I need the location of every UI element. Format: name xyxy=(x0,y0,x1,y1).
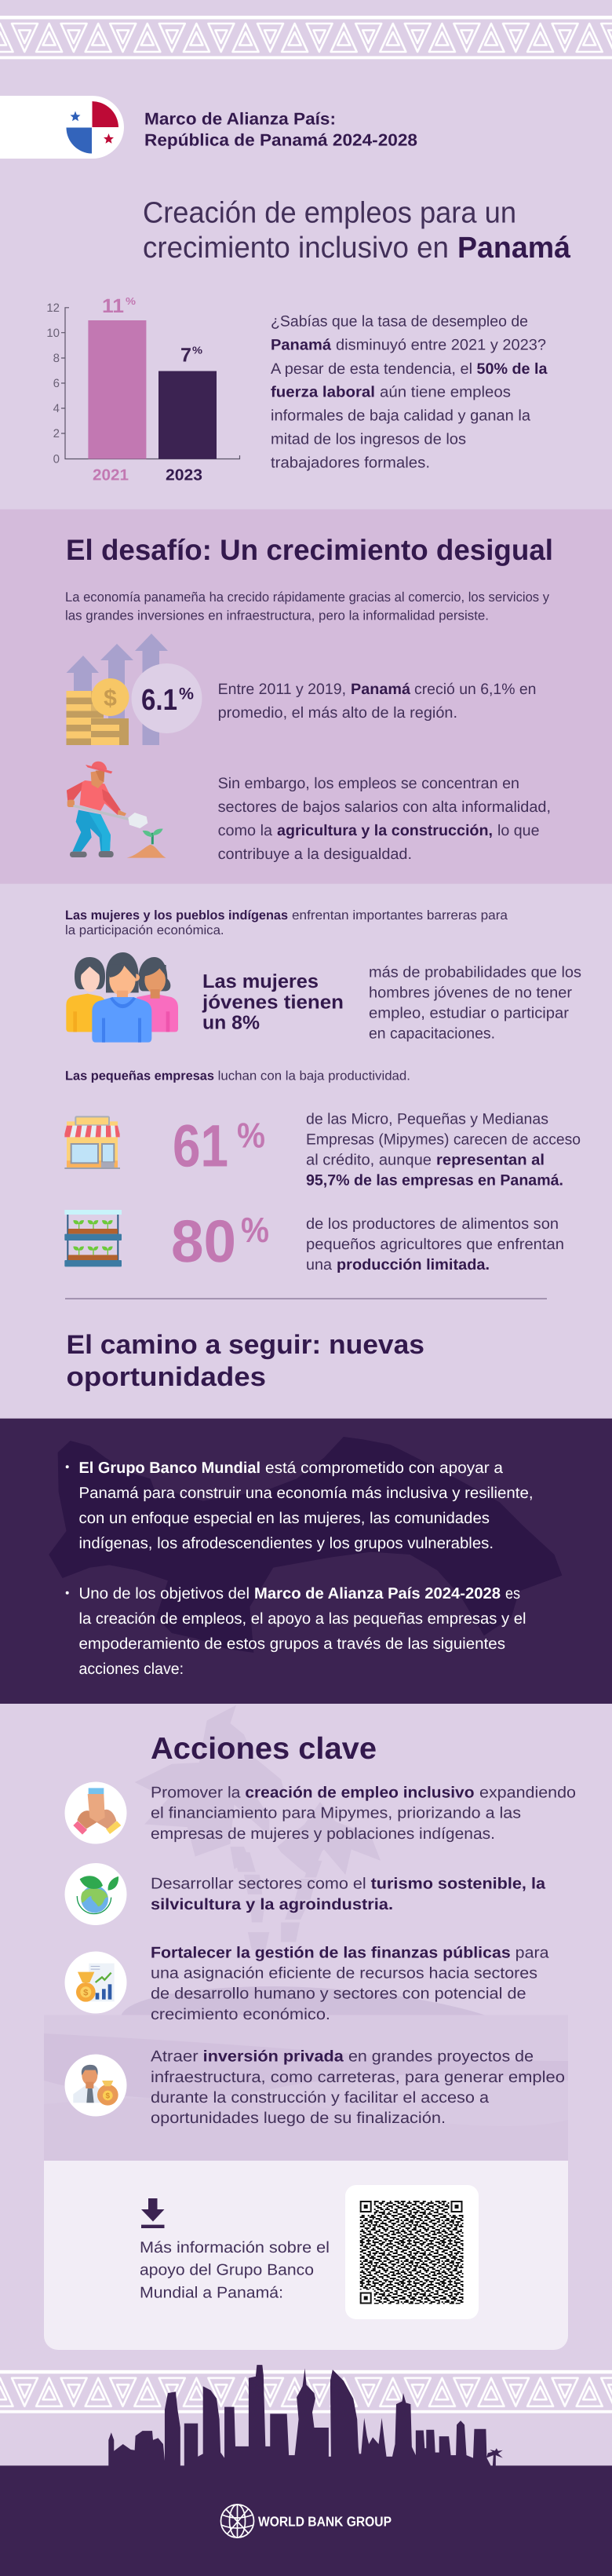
icon: growth arrows and coins with 6.1%: 6.1 xyxy=(141,684,177,717)
text block: MSME credit: al crédito, aunque xyxy=(306,1151,432,1168)
title xyxy=(143,197,571,265)
text block: public finances: para xyxy=(515,1945,549,1962)
stat: young women 8%: un 8% xyxy=(202,1012,260,1033)
stat: 80%: 80 xyxy=(171,1208,236,1275)
icon: globe with leaves xyxy=(64,1863,127,1925)
text block: inclusive employment: expandiendo xyxy=(479,1785,576,1802)
title: Creación de empleos para un xyxy=(143,197,516,230)
text block: food producers xyxy=(306,1215,564,1273)
heading: the challenge: El desafío: Un crecimiento desigual xyxy=(66,534,553,566)
text block: low wage sectors: Sin embargo, los empleos se concentran en xyxy=(218,775,519,792)
heading: the way forward xyxy=(66,1330,424,1392)
text block: private investment: oportunidades luego de su finalización. xyxy=(151,2110,446,2127)
text block: growth: Panamá xyxy=(351,681,410,698)
text block: unemployment explanation xyxy=(271,312,548,471)
text block: food producers: una xyxy=(306,1256,332,1273)
axis label: 2021: 2021 xyxy=(93,466,129,484)
text block: unemployment explanation: disminuyó entre 2021 y 2023? xyxy=(336,337,546,354)
bar chart: unemployment rate 2021 vs 2023 xyxy=(46,295,240,484)
text block: low wage sectors: contribuye a la desigualdad. xyxy=(218,846,412,863)
stat: young women 8%: Las mujeres xyxy=(202,971,319,992)
title: crecimiento inclusivo en xyxy=(143,232,449,265)
stat: 61%: 61 xyxy=(173,1113,228,1180)
axis label: 2023: 2023 xyxy=(166,466,202,484)
text block: public finances: crecimiento económico. xyxy=(151,2006,330,2023)
text block: private investment: durante la construcción y facilitar el acceso a xyxy=(151,2089,490,2106)
value label: 11% xyxy=(102,295,136,317)
text block: small businesses: Las pequeñas empresas xyxy=(65,1069,214,1083)
text block: low wage sectors xyxy=(218,775,551,863)
text block: low wage sectors: sectores de bajos salarios con alta informalidad, xyxy=(218,798,551,816)
text block: economy intro xyxy=(65,590,549,623)
footer panel with World Bank Group logo xyxy=(0,2465,612,2576)
icon: vertical farming shelves xyxy=(64,1210,122,1266)
stat: 61%: % xyxy=(237,1116,265,1156)
text block: commitment bullet: Panamá para construir una economía más inclusiva y resiliente, xyxy=(78,1485,534,1502)
icon: money bag and chart: $ xyxy=(83,1988,89,1997)
text block: MSME credit: de las Micro, Pequeñas y Medianas xyxy=(306,1110,548,1127)
QR code xyxy=(345,2185,479,2319)
icon: growth arrows and coins with 6.1% xyxy=(66,634,202,745)
panel: the challenge xyxy=(0,510,612,884)
text block: sustainable sectors: Desarrollar sectores como el xyxy=(151,1876,366,1893)
text block: public finances: de desarrollo humano y sectores con potencial de xyxy=(151,1986,526,2003)
text block: low wage sectors: agricultura y la construcción, xyxy=(277,822,493,839)
icon: money bag and chart xyxy=(64,1952,127,2013)
icon: investor with money bag: $ xyxy=(106,2092,110,2100)
stat: young women 8% xyxy=(202,971,344,1033)
text block: commitment bullet: indígenas, los afrodescendientes y los grupos vulnerables. xyxy=(78,1535,494,1552)
text block: private investment: infraestructura, como carreteras, para generar empleo xyxy=(151,2069,565,2086)
text block: framework bullet: es xyxy=(505,1585,520,1602)
header text: República de Panamá 2024-2028 xyxy=(144,131,417,150)
bar chart: unemployment rate 2021 vs 2023: 8 xyxy=(53,352,60,365)
text block: MSME credit: 95,7% de las empresas en Panamá. xyxy=(306,1171,563,1189)
text block: inclusive employment: empresas de mujeres y poblaciones indígenas. xyxy=(151,1825,495,1843)
text block: unemployment explanation: mitad de los ingresos de los xyxy=(271,431,466,448)
heading: the way forward: oportunidades xyxy=(66,1362,266,1392)
heading: the way forward: El camino a seguir: nuevas xyxy=(66,1330,424,1360)
stat: young women 8%: jóvenes tienen xyxy=(202,992,344,1013)
value label: 11%: % xyxy=(126,295,136,307)
icon: download arrow xyxy=(141,2198,165,2228)
icon: growth arrows and coins with 6.1%: % xyxy=(179,685,194,703)
text block: small businesses: luchan con la baja productividad. xyxy=(218,1069,410,1083)
stat: 80%: % xyxy=(241,1210,269,1250)
title: Panamá xyxy=(457,232,571,265)
text block: framework bullet: empoderamiento de estos grupos a través de las siguientes xyxy=(78,1635,505,1653)
bar chart: unemployment rate 2021 vs 2023: 2 xyxy=(53,427,60,440)
text block: growth: promedio, el más alto de la región. xyxy=(218,704,457,722)
text block: unemployment explanation: Panamá xyxy=(271,337,331,354)
text block: inclusive employment xyxy=(151,1785,576,1843)
panel: more information card xyxy=(44,2161,568,2350)
text block: women and indigenous peoples: la participación económica. xyxy=(65,923,224,937)
text block: more information: apoyo del Grupo Banco xyxy=(140,2262,314,2279)
decorative bottom band xyxy=(0,2370,612,2413)
text block: public finances xyxy=(151,1945,549,2023)
text block: women and indigenous peoples: enfrentan importantes barreras para xyxy=(292,908,508,923)
text block: more information: Más información sobre el xyxy=(140,2239,330,2256)
text block: commitment bullet: está comprometido con apoyar a xyxy=(265,1460,504,1477)
text block: commitment bullet xyxy=(66,1460,533,1552)
decorative top band xyxy=(0,16,612,59)
text block: young women description: en capacitaciones. xyxy=(369,1025,495,1043)
icon: World Bank globe xyxy=(221,2505,254,2538)
text block: food producers: pequeños agricultores que enfrentan xyxy=(306,1236,564,1253)
text block: sustainable sectors: silvicultura y la agroindustria. xyxy=(151,1896,393,1913)
text block: women and indigenous peoples xyxy=(65,908,508,937)
text block: women and indigenous peoples: Las mujeres y los pueblos indígenas xyxy=(65,908,288,923)
text block: private investment: en grandes proyectos de xyxy=(348,2048,534,2066)
text block: young women description: hombres jóvenes de no tener xyxy=(369,985,573,1002)
text block: growth xyxy=(218,681,537,722)
text block: growth: Entre 2011 y 2019, xyxy=(218,681,346,698)
text block: framework bullet: la creación de empleos, el apoyo a las pequeñas empresas y el xyxy=(78,1610,526,1628)
value label: 11%: 11 xyxy=(102,295,124,317)
text block: young women description xyxy=(369,964,581,1043)
value label: 7%: 7 xyxy=(180,344,191,366)
text block: more information: Mundial a Panamá: xyxy=(140,2284,283,2301)
bar chart: unemployment rate 2021 vs 2023: 6 xyxy=(53,377,60,390)
text block: framework bullet: Uno de los objetivos del xyxy=(78,1585,250,1602)
text block: MSME credit xyxy=(306,1110,581,1189)
text block: framework bullet: Marco de Alianza País 2024-2028 xyxy=(254,1585,501,1602)
text block: sustainable sectors xyxy=(151,1876,546,1913)
icon: growth arrows and coins with 6.1%: $ xyxy=(104,685,117,711)
text block: economy intro: La economía panameña ha crecido rápidamente gracias al comercio, los servicios y xyxy=(65,590,549,605)
bar: 2021 xyxy=(88,320,146,459)
header text: Marco de Alianza País: xyxy=(144,109,336,128)
text block: unemployment explanation: trabajadores formales. xyxy=(271,454,430,471)
text block: framework bullet xyxy=(66,1585,526,1678)
bar chart: unemployment rate 2021 vs 2023: 0 xyxy=(53,452,60,466)
panel: World Bank commitment xyxy=(0,1419,612,1704)
icon: storefront xyxy=(64,1116,120,1169)
text block: unemployment explanation: aún tiene empleos xyxy=(380,384,511,401)
stat: 80% xyxy=(171,1208,269,1275)
text block: commitment bullet: El Grupo Banco Mundial xyxy=(78,1460,260,1477)
text block: MSME credit: representan al xyxy=(436,1151,545,1168)
text block: private investment: inversión privada xyxy=(203,2048,344,2066)
text block: young women description: empleo, estudiar o participar xyxy=(369,1005,570,1022)
text block: unemployment explanation: ¿Sabías que la tasa de desempleo de xyxy=(271,312,528,330)
bar chart: unemployment rate 2021 vs 2023: 4 xyxy=(53,402,60,415)
text block: growth: creció un 6,1% en xyxy=(414,681,537,698)
map of Panama silhouette xyxy=(49,1437,562,1653)
text block: food producers: producción limitada. xyxy=(337,1256,490,1273)
text block: public finances: una asignación eficiente de recursos hacia sectores xyxy=(151,1965,537,1982)
text block: low wage sectors: como la xyxy=(218,822,272,839)
icon: Panama flag xyxy=(0,96,124,159)
text block: unemployment explanation: 50% de la xyxy=(477,360,548,378)
text block: framework bullet: acciones clave: xyxy=(78,1661,184,1678)
bar: 2023 xyxy=(158,371,217,459)
value label: 7%: % xyxy=(192,344,202,356)
text block: young women description: más de probabilidades que los xyxy=(369,964,581,981)
text block: inclusive employment: Promover la xyxy=(151,1785,241,1802)
value label: 7% xyxy=(180,344,202,366)
bar chart: unemployment rate 2021 vs 2023: 10 xyxy=(46,327,60,340)
text block: food producers: de los productores de alimentos son xyxy=(306,1215,559,1233)
text block: economy intro: las grandes inversiones en infraestructura, pero la informalidad persiste. xyxy=(65,608,489,623)
text block: unemployment explanation: A pesar de esta tendencia, el xyxy=(271,360,472,378)
header: country flag and framework name xyxy=(0,96,417,159)
logo wordmark: WORLD BANK GROUP xyxy=(258,2514,392,2530)
bar chart: unemployment rate 2021 vs 2023: 12 xyxy=(46,301,60,315)
icon: joined hands xyxy=(64,1782,127,1843)
text block: sustainable sectors: turismo sostenible, la xyxy=(371,1876,546,1893)
text block: private investment: Atraer xyxy=(151,2048,199,2066)
header text xyxy=(144,109,417,150)
text block: inclusive employment: el financiamiento para Mipymes, priorizando a las xyxy=(151,1805,521,1822)
text block: MSME credit: Empresas (Mipymes) carecen de acceso xyxy=(306,1131,581,1148)
text block: unemployment explanation: informales de baja calidad y ganan la xyxy=(271,407,530,424)
text block: unemployment explanation: fuerza laboral xyxy=(271,384,375,401)
heading: key actions: Acciones clave xyxy=(151,1732,377,1766)
text block: commitment bullet: con un enfoque especial en las mujeres, las comunidades xyxy=(78,1510,490,1527)
text block: public finances: Fortalecer la gestión de las finanzas públicas xyxy=(151,1945,511,1962)
text block: private investment xyxy=(151,2048,565,2127)
icon: investor with money bag xyxy=(64,2054,127,2117)
icon: farmer with shovel and sprout xyxy=(67,762,166,858)
skyline of Panama City xyxy=(108,2365,503,2466)
text block: inclusive employment: creación de empleo inclusivo xyxy=(245,1785,474,1802)
text block: low wage sectors: lo que xyxy=(497,822,540,839)
icon: three women xyxy=(66,952,178,1043)
background illustration: palm island and sea xyxy=(44,1705,568,2164)
text block: more information xyxy=(140,2239,330,2301)
text block: small businesses xyxy=(65,1069,410,1083)
